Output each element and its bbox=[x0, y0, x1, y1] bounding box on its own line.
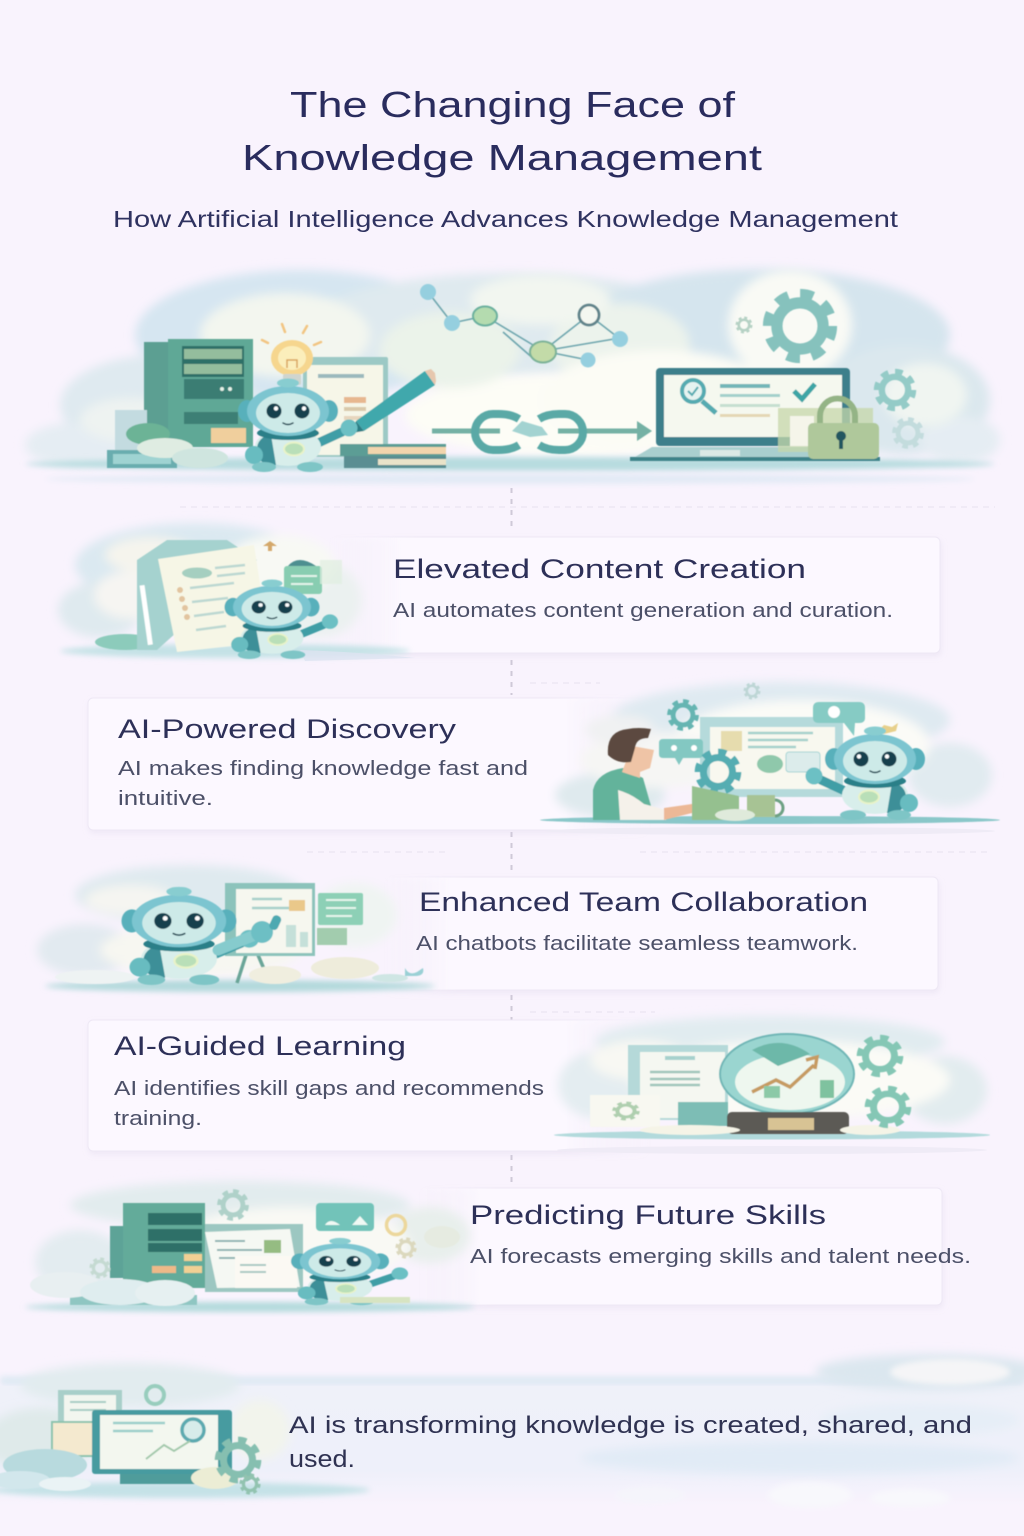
subtitle: How Artificial Intelligence Advances Knowledge Management bbox=[113, 206, 899, 232]
footer illustration: monitor bbox=[0, 1386, 370, 1498]
panel: enhanced team collaboration bbox=[37, 865, 938, 992]
card bbox=[420, 1188, 942, 1305]
panel: AI-powered discovery bbox=[88, 682, 1000, 835]
description: AI automates content generation and curation. bbox=[393, 600, 893, 622]
hero clouds bbox=[25, 269, 1000, 467]
closing statement bbox=[289, 1412, 972, 1473]
description bbox=[114, 1078, 544, 1130]
light bulb bbox=[262, 324, 321, 385]
card bbox=[330, 537, 940, 653]
panel: predicting future skills bbox=[25, 1181, 971, 1312]
description: AI forecasts emerging skills and talent needs. bbox=[470, 1246, 971, 1268]
footer banner bbox=[0, 1354, 1024, 1508]
description: AI identifies skill gaps and recommends bbox=[114, 1078, 544, 1100]
padlock bbox=[778, 398, 879, 459]
pencil bbox=[352, 369, 436, 433]
card bbox=[88, 1020, 648, 1151]
robot bbox=[238, 378, 358, 472]
illustration: server and robot bbox=[25, 1181, 475, 1312]
panel: AI-guided learning bbox=[88, 1016, 990, 1154]
panel: elevated content creation bbox=[58, 523, 940, 661]
description: AI makes finding knowledge fast and bbox=[118, 758, 528, 780]
hero illustration bbox=[25, 269, 1000, 484]
card bbox=[385, 877, 938, 990]
illustration: document and robot bbox=[58, 523, 415, 661]
description: AI chatbots facilitate seamless teamwork. bbox=[416, 933, 858, 955]
laptop bbox=[630, 368, 880, 461]
books bbox=[340, 444, 446, 468]
gears bbox=[737, 294, 922, 447]
closing statement: used. bbox=[289, 1446, 355, 1473]
title: The Changing Face of bbox=[290, 84, 736, 125]
description: intuitive. bbox=[118, 788, 213, 810]
closing statement: AI is transforming knowledge is created, shared, and bbox=[289, 1412, 972, 1439]
network graph bbox=[420, 284, 628, 368]
document bbox=[303, 357, 388, 457]
description bbox=[118, 758, 528, 810]
heading: AI-Powered Discovery bbox=[118, 714, 457, 744]
heading: Elevated Content Creation bbox=[393, 554, 806, 584]
floor band bbox=[25, 457, 995, 471]
illustration: robot and presentation board bbox=[37, 865, 435, 992]
heading: Enhanced Team Collaboration bbox=[419, 887, 868, 917]
illustration: person and robot bbox=[540, 682, 1000, 835]
server rack bbox=[107, 339, 253, 468]
footer clouds bbox=[0, 1354, 1024, 1508]
title bbox=[242, 84, 762, 178]
illustration: crystal ball with chart bbox=[554, 1016, 990, 1154]
heading: Predicting Future Skills bbox=[470, 1200, 826, 1230]
connector: dashed spine bbox=[510, 488, 512, 1185]
heading: AI-Guided Learning bbox=[114, 1031, 406, 1061]
chain link arrow bbox=[432, 414, 652, 450]
description: training. bbox=[114, 1108, 202, 1130]
card bbox=[88, 698, 648, 830]
person bbox=[593, 728, 696, 820]
title: Knowledge Management bbox=[242, 137, 762, 178]
